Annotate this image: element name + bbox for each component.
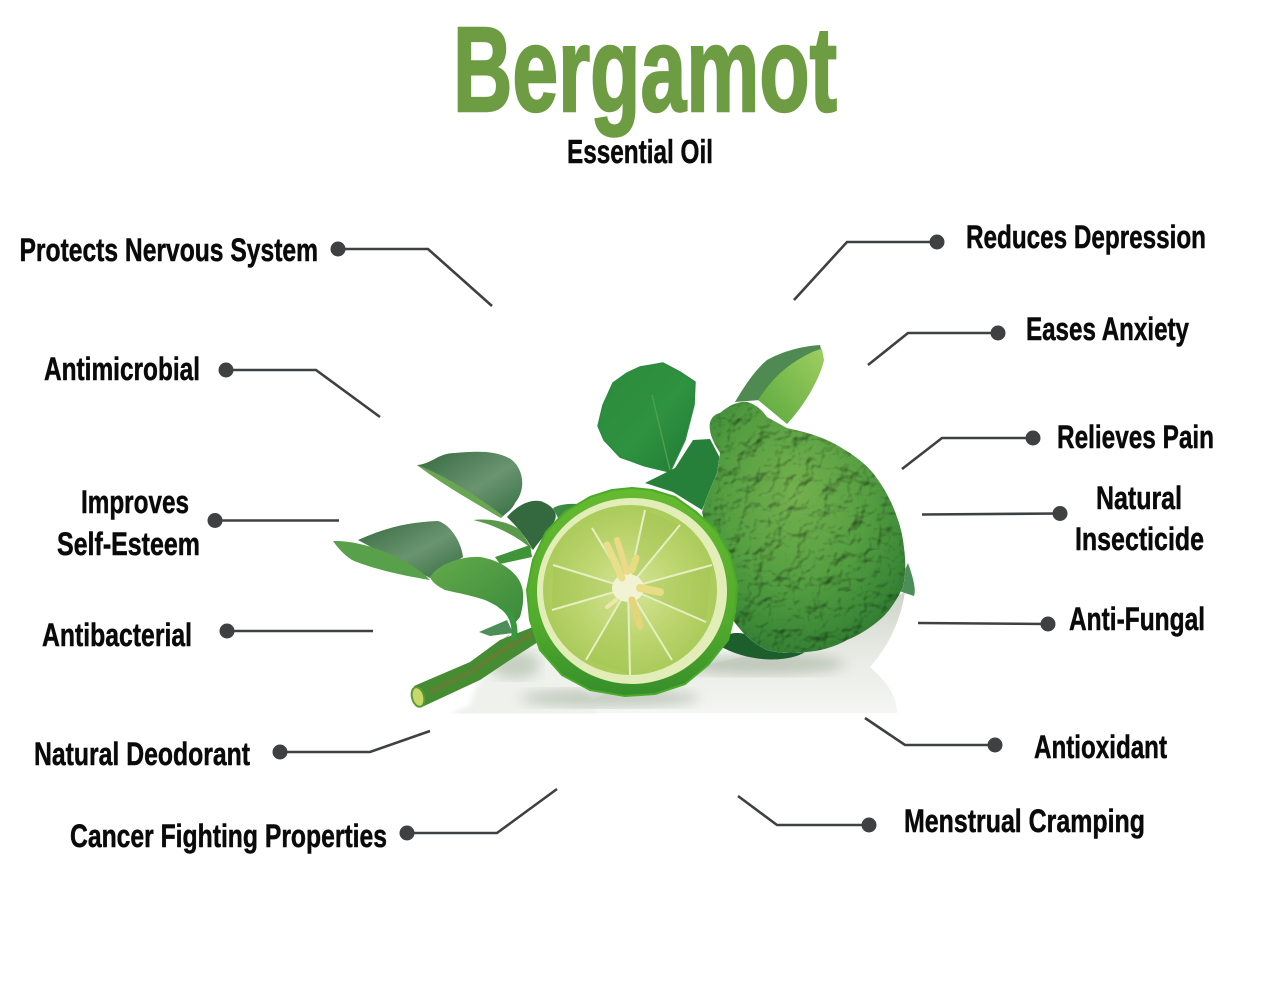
leader line [227,630,373,632]
leaf: small lower right [900,563,915,596]
darker segment shading [560,523,700,658]
table reflection and shadow [440,592,905,720]
leader line [738,796,869,825]
callout: Eases Anxiety [868,311,1189,365]
leaf: lower small [479,620,513,636]
leader line [868,333,998,365]
leader line [226,370,380,417]
callout: Reduces Depression [794,219,1206,300]
callout: Protects Nervous System [20,232,492,306]
label: Antibacterial [42,617,192,653]
leaf: front [430,557,523,640]
leader line [918,623,1048,624]
callout: Cancer Fighting Properties [70,789,557,854]
label: Antioxidant [1034,729,1167,765]
leader line [280,731,430,752]
subtitle: Essential Oil [567,133,713,170]
dot [208,513,222,528]
callout: Natural Insecticide [922,480,1204,557]
label: Eases Anxiety [1026,311,1189,347]
leaf: behind fruit [645,439,720,510]
callout: Antimicrobial [44,351,380,417]
dot [400,826,414,840]
callout: Relieves Pain [902,419,1214,469]
leaf: upper right [735,345,824,424]
label line 1: Improves [81,484,189,520]
leader line [922,514,1060,515]
fruit: cut half lime [527,488,737,696]
callout: Anti-Fungal [918,601,1205,637]
dot [862,818,876,832]
title: Bergamot [453,1,837,137]
dot [220,624,234,638]
leader line [865,718,995,745]
label line 2: Self-Esteem [57,526,200,562]
leaf: top left [417,452,522,518]
dot [218,362,234,378]
leader line [407,789,557,833]
callout: Improves Self-Esteem [57,484,339,562]
leader line [215,519,339,522]
label: Menstrual Cramping [904,803,1145,839]
leader line [338,249,492,306]
leader line [902,438,1033,469]
leaf shadow under fruit [718,633,805,659]
label: Reduces Depression [966,219,1206,255]
dot [1052,506,1068,521]
dot [1040,616,1056,632]
leaf: upper centre [598,363,695,472]
dot [1026,430,1040,446]
callout: Menstrual Cramping [738,796,1145,839]
label line 2: Insecticide [1075,521,1204,557]
label: Relieves Pain [1057,419,1214,455]
dot [990,326,1006,340]
core and seeds [612,574,644,602]
photo: bergamot fruits and leaves [333,345,915,720]
segment membranes [552,510,712,675]
fruit: whole bergamot with bumpy rind [702,402,905,653]
callout: Natural Deodorant [34,731,430,772]
dot [330,242,346,256]
dot [930,234,944,250]
dot [988,738,1002,752]
leaf: small middle [473,501,580,550]
label line 1: Natural [1096,480,1182,516]
label: Natural Deodorant [34,736,250,772]
stem: main with cut end [410,627,538,708]
stem: upper [495,545,532,564]
label: Protects Nervous System [20,232,318,268]
callout: Antibacterial [42,617,373,653]
leaf: left [333,521,463,580]
callout: Antioxidant [865,718,1167,765]
label: Antimicrobial [44,351,200,387]
label: Anti-Fungal [1069,601,1205,637]
leader line [794,242,937,300]
label: Cancer Fighting Properties [70,818,387,854]
dot [272,744,288,760]
